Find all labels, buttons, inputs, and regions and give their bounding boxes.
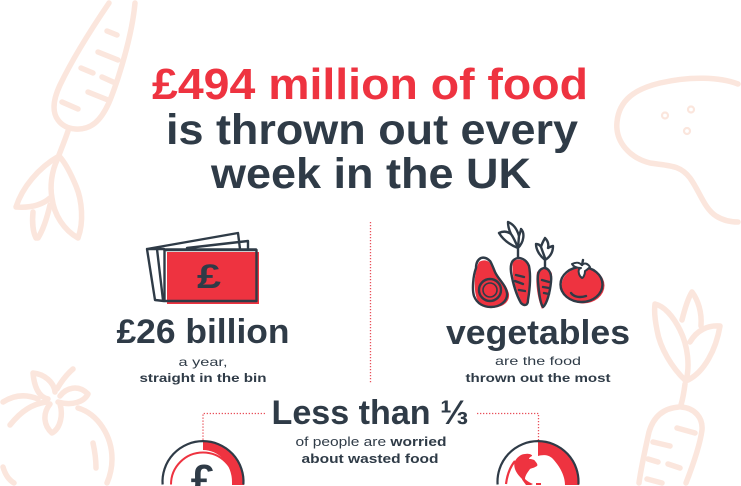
stat: 26 billion [116, 313, 290, 385]
stat: vegetables: thrown out the most [466, 371, 610, 385]
globe landmasses [538, 441, 579, 485]
background icon: tomato bottom left [3, 369, 112, 483]
stat: less than a third [272, 394, 468, 466]
carrot large [499, 222, 530, 305]
stat: vegetables: vegetables [446, 314, 630, 352]
icon: banknotes [147, 233, 259, 304]
stat: vegetables: are the food [495, 354, 581, 368]
title [152, 60, 588, 198]
stat: vegetables [446, 314, 630, 385]
icon: pound circle [162, 441, 244, 485]
title line 1: £494 million of food [152, 60, 588, 109]
stat: 26 billion: straight in the bin [140, 371, 266, 385]
title line 3: week in the UK [210, 150, 531, 198]
stat: less than a third: Less than ⅓ [272, 394, 468, 432]
tomato [560, 260, 604, 304]
stat: 26 billion: £26 billion [116, 313, 290, 351]
icon: vegetables [473, 222, 604, 309]
connector right [477, 414, 538, 441]
stat: less than a third: of people are worried [296, 435, 446, 449]
stat: 26 billion: a year, [178, 355, 228, 369]
icon: globe circle [498, 441, 579, 485]
background icon: potato right [617, 78, 738, 222]
carrot small [536, 238, 553, 309]
avocado [473, 258, 509, 308]
connector left [203, 414, 265, 441]
stat: less than a third: about wasted food [302, 452, 438, 466]
pound sign: £ [197, 258, 221, 296]
background icon: carrot bottom right [639, 292, 720, 483]
centre dotted divider [370, 222, 372, 384]
background icon: carrot top left [16, 3, 135, 238]
title line 2: is thrown out every [166, 106, 578, 154]
